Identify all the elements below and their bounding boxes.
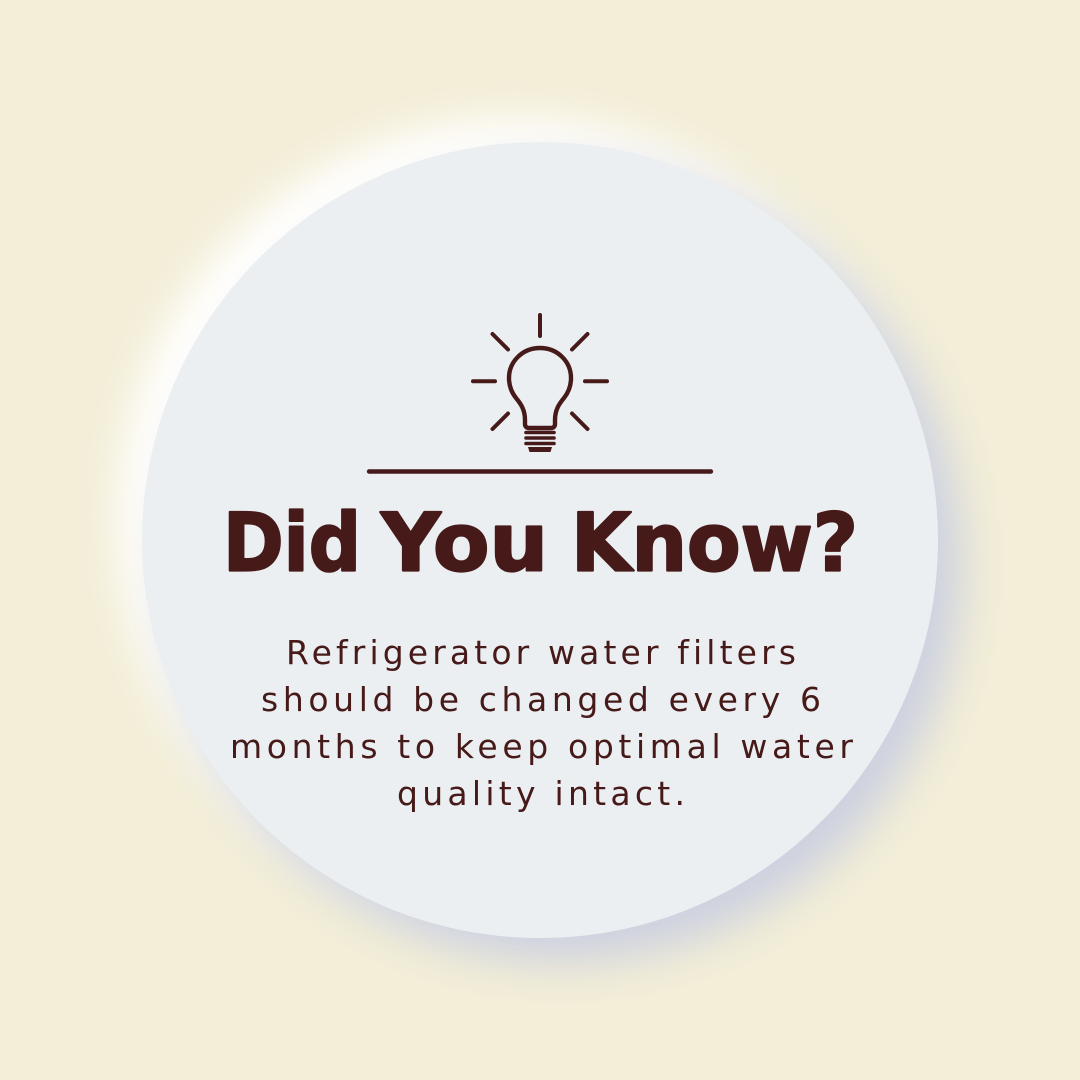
body text: months to keep optimal water [230, 727, 853, 766]
panel: circle [142, 142, 938, 938]
divider line [369, 469, 711, 474]
body text: should be changed every 6 [261, 680, 821, 719]
heading: Know? [571, 496, 858, 590]
heading: Did [223, 496, 361, 590]
heading: You [380, 496, 548, 590]
body text [230, 633, 853, 813]
heading [223, 496, 858, 590]
body text: Refrigerator water filters [286, 633, 796, 672]
body text: quality intact. [397, 774, 685, 813]
icon: light bulb [473, 315, 607, 452]
